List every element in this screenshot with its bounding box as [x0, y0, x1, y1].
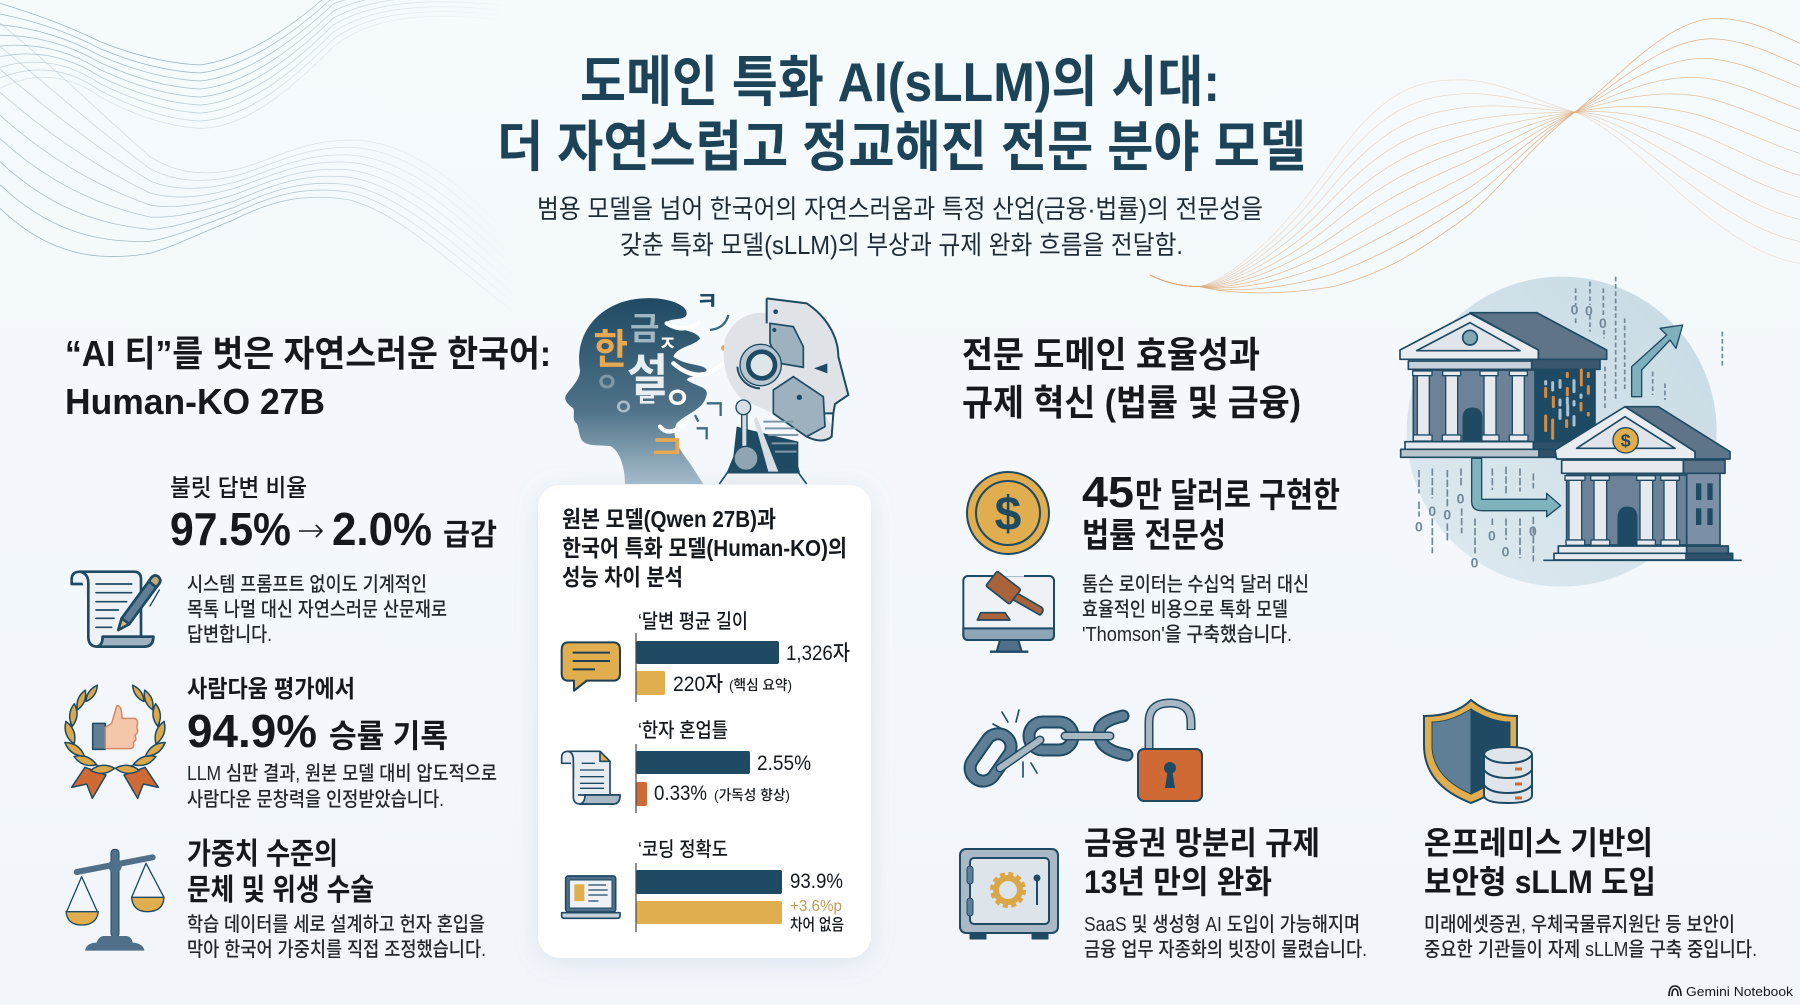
text: weight description — [187, 913, 486, 961]
heading: network separation — [1084, 825, 1320, 900]
text: Thomson description — [1082, 573, 1309, 646]
stat: weight-level surgery: 가중치 수준의 — [187, 838, 338, 871]
heading: on-premise: 온프레미스 기반의 — [1424, 825, 1653, 861]
heading: network separation: 13년 만의 완화 — [1084, 864, 1272, 900]
flow arrow — [1472, 458, 1561, 517]
title: 도메인 특화 AI(sLLM)의 시대: — [580, 51, 1220, 113]
illustration: banks: 0 — [1529, 523, 1537, 539]
text: Thomson description: 효율적인 비용으로 톡화 모델 — [1082, 598, 1288, 621]
icon: gavel on monitor — [963, 570, 1054, 652]
text: Thomson description: 톰슨 로이터는 수십억 달러 대신 — [1082, 573, 1309, 596]
stat: 450k dollars: 45 — [1082, 468, 1134, 517]
chart: average answer length: 1,326자 — [786, 642, 850, 665]
head letters: ㅇ — [613, 395, 634, 420]
title: 더 자연스럽고 정교해진 전문 분야 모델 — [497, 116, 1306, 178]
head letters: 금 — [630, 310, 659, 346]
text: humanity description: 사람다운 문창력을 인정받았습니다. — [187, 788, 444, 811]
head letters: ㅇ — [664, 382, 691, 415]
chart: hanja mixing — [636, 719, 811, 813]
left heading: “AI 티”를 벗은 자연스러운 한국어: — [65, 333, 551, 374]
binary streams — [1419, 277, 1722, 562]
icon: balance scale — [66, 849, 164, 951]
up arrow — [1632, 325, 1683, 397]
stat: 450k dollars: 만 달러로 구현한 — [1135, 477, 1340, 515]
text: bullet description: 답변합니다. — [187, 623, 272, 646]
panel: comparison card — [538, 485, 871, 958]
text: weight description: 학습 데이터를 세로 설계하고 헌자 혼입을 — [187, 913, 485, 936]
head letters: 9 — [737, 317, 749, 342]
chart: hanja mixing: ‘한자 혼업틀 — [638, 719, 728, 742]
head letters: ㅋ — [696, 288, 718, 315]
icon: laurel with thumbs up — [62, 683, 168, 798]
head letters: 한 — [593, 326, 628, 372]
chart: coding accuracy — [636, 838, 844, 934]
stat: humanity 94.9%: 94.9% — [187, 705, 317, 757]
right heading: 전문 도메인 효율성과 — [962, 334, 1260, 375]
heading: on-premise — [1424, 825, 1656, 900]
left heading — [65, 333, 551, 422]
stat: humanity 94.9% — [187, 676, 448, 757]
chart: hanja mixing: (가독성 향상) — [714, 787, 790, 803]
icon: safe — [960, 849, 1058, 939]
chart: average answer length: ‘달변 평균 길이 — [638, 610, 748, 633]
icon: laptop — [562, 876, 620, 918]
chart: average answer length: (핵심 요약) — [729, 677, 792, 693]
head letters — [593, 288, 749, 452]
text: network separation description: SaaS 및 생성형 AI 도입이 가능해지며 — [1084, 913, 1360, 936]
human silhouette — [565, 298, 707, 484]
right heading: 규제 혁신 (법률 및 금융) — [962, 382, 1301, 423]
illustration: banks: 0 — [1585, 302, 1593, 318]
head letters: 설 — [627, 351, 668, 402]
right heading — [962, 334, 1301, 423]
text: humanity description: LLM 심판 결과, 원본 모델 대비 압도적으로 — [187, 762, 497, 785]
card heading — [562, 506, 847, 590]
illustration: banks: 0 — [1571, 302, 1579, 318]
icon: shield with database — [1424, 700, 1532, 803]
chart: coding accuracy: 차어 없음 — [790, 916, 844, 934]
stat: bullet answer ratio — [170, 475, 497, 555]
illustration: banks: 0 — [1502, 543, 1510, 559]
text: bullet description — [187, 573, 447, 646]
chart: average answer length — [636, 610, 850, 702]
text: on-premise description — [1424, 913, 1757, 961]
illustration: banks: 0 — [1457, 490, 1465, 506]
stat: bullet answer ratio: 불릿 답변 비율 — [170, 475, 307, 502]
text: on-premise description: 중요한 기관들이 자제 sLLM을 구축 중입니다. — [1424, 938, 1757, 961]
icon: dollar coin — [967, 472, 1049, 554]
head letters: ㅈ — [658, 334, 677, 356]
stat: 450k dollars: 법률 전문성 — [1082, 517, 1226, 555]
illustration: banks: 0 — [1443, 507, 1451, 523]
icon: dollar coin: $ — [995, 488, 1022, 541]
stat: bullet answer ratio: 97.5% — [170, 503, 291, 555]
text: bullet description: 시스템 프롬프트 없이도 기계적인 — [187, 573, 427, 596]
left bank — [1400, 313, 1607, 457]
illustration: banks — [1400, 277, 1742, 587]
stat: weight-level surgery — [187, 838, 374, 907]
icon: open padlock — [1138, 703, 1202, 801]
robot neck — [727, 427, 800, 473]
text: weight description: 막아 한국어 가중치를 직접 조정했습니다. — [187, 938, 486, 961]
heading: on-premise: 보안형 sLLM 도입 — [1424, 864, 1656, 900]
chart: hanja mixing: 2.55% — [757, 752, 811, 775]
head letters: ㄹ — [636, 386, 658, 413]
illustration: banks: 0 — [1599, 315, 1607, 331]
subtitle: 갖춘 특화 모델(sLLM)의 부상과 규제 완화 흐름을 전달함. — [620, 230, 1183, 260]
stat: humanity 94.9%: 사람다움 평가에서 — [187, 676, 355, 703]
stat: bullet answer ratio: 2.0% — [332, 503, 432, 555]
card heading: 원본 모델(Qwen 27B)과 — [562, 506, 776, 532]
subtitle: 범용 모델을 넘어 한국어의 자연스러움과 특정 산업(금융·법률)의 전문성을 — [537, 194, 1263, 224]
text: on-premise description: 미래에셋증권, 우체국물류지원단 등 보안이 — [1424, 913, 1735, 936]
stat: weight-level surgery: 문체 및 위생 수술 — [187, 874, 374, 907]
icon: document scroll — [562, 751, 620, 804]
card heading: 한국어 특화 모델(Human-KO)의 — [562, 535, 847, 561]
text: network separation description: 금융 업무 자종화의 빗장이 물렸습니다. — [1084, 938, 1367, 961]
background waves: blue top-left — [0, 0, 520, 317]
icon: scroll and pen — [72, 572, 160, 647]
right bank — [1543, 407, 1742, 560]
text: Thomson description: 'Thomson'을 구축했습니다. — [1082, 623, 1292, 646]
chart: average answer length: 220자 — [673, 673, 723, 696]
chart: hanja mixing: 0.33% — [654, 782, 707, 805]
footer: Gemini Notebook mark: Gemini Notebook — [1686, 984, 1794, 999]
chart: coding accuracy: +3.6%p — [790, 898, 842, 915]
head letters: ㅇ — [595, 368, 619, 398]
data pillars — [1546, 370, 1588, 438]
panel: Human-KO left column — [62, 333, 551, 961]
illustration: banks: 0 — [1488, 528, 1496, 544]
stat: humanity 94.9%: 승률 기록 — [329, 718, 448, 754]
stat: 450k dollars — [1082, 468, 1340, 555]
stat: bullet answer ratio: 급감 — [443, 519, 497, 552]
chart: coding accuracy: 93.9% — [790, 870, 843, 893]
text: bullet description: 목톡 나멀 대신 자연스러문 산문재로 — [187, 598, 447, 621]
robot head — [724, 298, 848, 441]
illustration: banks: 0 — [1415, 519, 1423, 535]
illustration: banks: $ — [1621, 431, 1631, 451]
icon: speech bubble — [562, 642, 620, 691]
icon: broken chain — [965, 710, 1127, 786]
illustration: banks: 0 — [1471, 554, 1479, 570]
background waves: orange right — [1150, 18, 1800, 293]
illustration: banks: 0 — [1428, 503, 1436, 519]
panel: domain efficiency right column — [960, 277, 1757, 961]
title — [497, 51, 1306, 178]
left heading: Human-KO 27B — [65, 381, 325, 422]
illustration: human and robot head — [565, 288, 848, 484]
heading: network separation: 금융권 망분리 규제 — [1084, 825, 1320, 861]
chart: coding accuracy: ‘코딩 정확도 — [638, 838, 728, 861]
text: humanity description — [187, 762, 497, 811]
card heading: 성능 차이 분석 — [562, 564, 683, 590]
text: network separation description — [1084, 913, 1367, 961]
subtitle — [537, 194, 1263, 260]
